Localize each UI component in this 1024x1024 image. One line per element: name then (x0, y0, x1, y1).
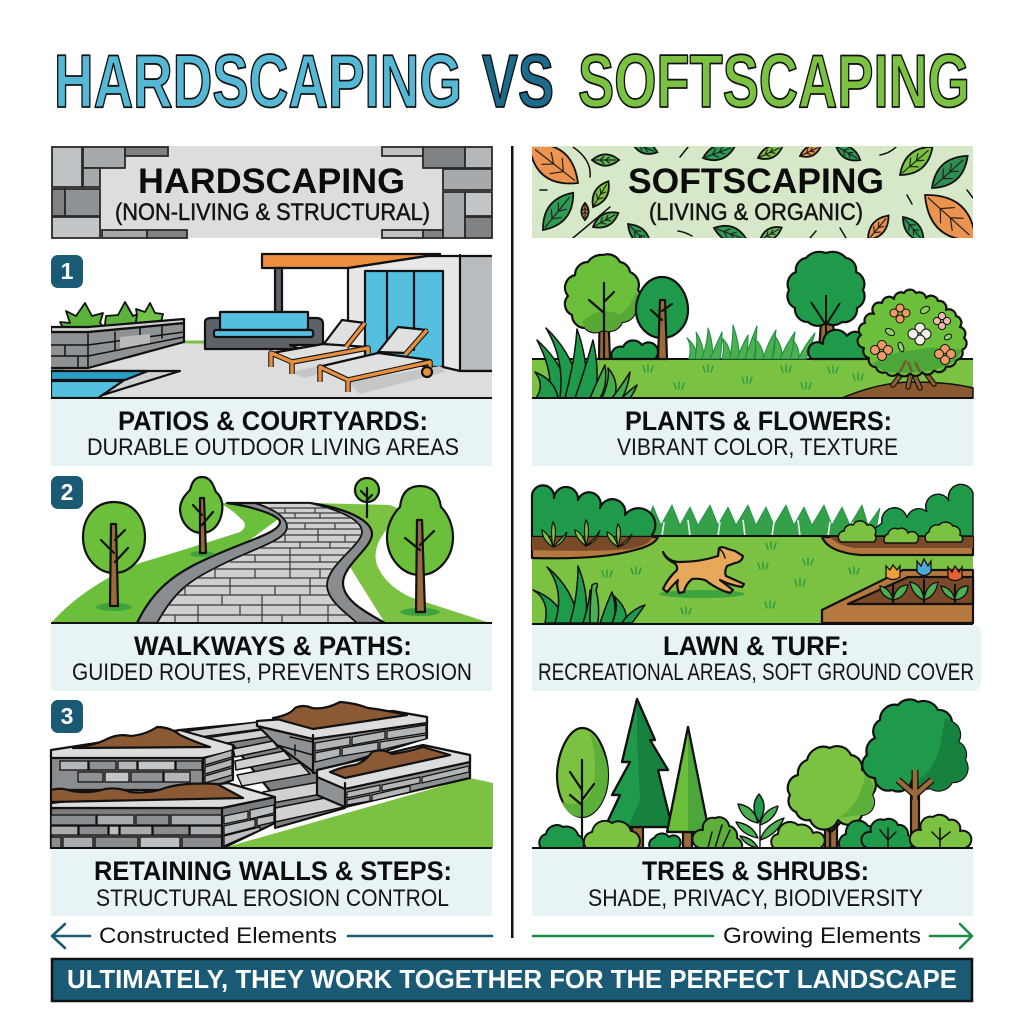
caption text: LAWN & TURF: (663, 631, 849, 661)
loungers (348, 366, 445, 394)
caption text (538, 631, 974, 686)
panel: walkways and paths (51, 477, 492, 691)
conclusion banner: ULTIMATELY, THEY WORK TOGETHER FOR THE PERFECT LANDSCAPE (67, 964, 957, 994)
panel: hardscaping header: (NON-LIVING & STRUCTURAL) (115, 199, 430, 226)
right lower wall (317, 755, 470, 807)
caption text: GUIDED ROUTES, PREVENTS EROSION (72, 659, 472, 686)
conclusion banner (52, 959, 972, 1001)
center divider (511, 146, 514, 938)
caption band (532, 399, 973, 466)
caption band (532, 849, 973, 916)
icon: running dog (659, 547, 745, 598)
panel: trees and shrubs (532, 699, 973, 916)
badge: number 3 (51, 700, 83, 733)
badge: number 2 (51, 476, 83, 509)
badge: number 1 (51, 255, 83, 288)
caption band (51, 624, 492, 691)
panel: softscaping header (532, 146, 973, 238)
caption band (51, 399, 492, 466)
title: HARDSCAPING (54, 39, 462, 123)
caption text (588, 856, 923, 912)
illustration: garden with trees and flowering bush (532, 252, 973, 398)
caption text: SHADE, PRIVACY, BIODIVERSITY (588, 885, 923, 912)
caption band (51, 849, 492, 916)
caption text: DURABLE OUTDOOR LIVING AREAS (87, 434, 459, 461)
title: VS (482, 39, 554, 123)
illustration: patio scene (51, 254, 492, 398)
caption text: TREES & SHRUBS: (642, 856, 869, 886)
panel: patios and courtyards (51, 254, 492, 466)
panel: hardscaping header (51, 146, 492, 238)
caption text (94, 856, 452, 912)
wall planting (59, 301, 164, 326)
badge: number 2: 2 (61, 479, 73, 505)
upper right wall (257, 717, 427, 773)
grass clusters (535, 328, 637, 398)
lower left wall (51, 797, 275, 848)
caption text (72, 631, 472, 686)
arrow: growing elements: Growing Elements (723, 923, 921, 948)
panel: softscaping header: SOFTSCAPING (628, 162, 884, 201)
panel: hardscaping header: HARDSCAPING (138, 162, 405, 201)
badge: number 3: 3 (61, 703, 73, 729)
caption band (532, 625, 981, 691)
illustration: curved path with trees (51, 477, 490, 623)
caption text: RETAINING WALLS & STEPS: (94, 856, 452, 886)
caption text: PLANTS & FLOWERS: (625, 406, 892, 436)
plant sprig (736, 794, 784, 848)
arrow: constructed elements: Constructed Elements (99, 923, 337, 948)
illustration: mixed trees and shrubs (539, 699, 971, 848)
illustration: lawn with running dog (532, 484, 973, 624)
panel: plants and flowers (532, 252, 973, 466)
badge: number 1: 1 (61, 258, 74, 284)
panel: retaining walls and steps (51, 702, 493, 916)
illustration: terraced walls (51, 702, 493, 848)
caption text (87, 406, 459, 461)
raised planter with tulips (822, 559, 973, 623)
panel: lawn and turf (532, 484, 981, 691)
upper left wall (51, 745, 233, 790)
caption text (617, 406, 898, 461)
panel: softscaping header: (LIVING & ORGANIC) (649, 199, 863, 226)
tall grass (687, 325, 815, 359)
title (54, 39, 970, 123)
arrow: growing elements (533, 923, 972, 948)
caption text: VIBRANT COLOR, TEXTURE (617, 434, 898, 461)
flowering bush (858, 290, 967, 388)
caption text: STRUCTURAL EROSION CONTROL (96, 885, 449, 912)
arrow: constructed elements (52, 923, 492, 948)
caption text: PATIOS & COURTYARDS: (118, 406, 428, 436)
caption text: WALKWAYS & PATHS: (134, 631, 412, 661)
